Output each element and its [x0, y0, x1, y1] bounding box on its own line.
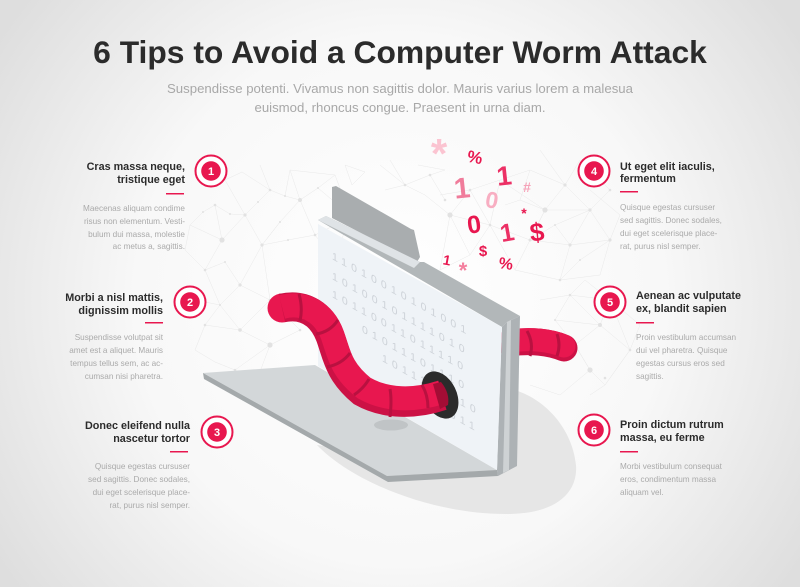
subtitle: [167, 81, 634, 115]
tip 1 heading: Cras massa neque,: [87, 161, 185, 173]
binary code: [332, 251, 480, 436]
tip 3 body: rat, purus nisl semper.: [109, 501, 190, 510]
tip 4 rule: [620, 191, 638, 192]
tip 4 badge: [578, 156, 610, 186]
tip 2 body: cumsan nisi pharetra.: [85, 372, 163, 381]
subtitle: Suspendisse potenti. Vivamus non sagittis dolor. Mauris varius lorem a malesua: [167, 81, 634, 96]
laptop base: [203, 365, 497, 476]
tip 1 badge: [196, 156, 226, 186]
screen top edge: [318, 216, 520, 327]
tip 6 badge: [578, 414, 610, 446]
tip 1 body: Maecenas aliquam condime: [83, 204, 185, 213]
floating symbols: 0: [483, 186, 501, 214]
tip 3 rule: [170, 451, 188, 452]
tip 6 body: eros, condimentum massa: [620, 475, 716, 484]
floating symbols: *: [431, 130, 448, 177]
binary code: 11010010101001: [332, 251, 470, 339]
laptop shadow: [317, 389, 576, 514]
tip 1 body: [83, 204, 185, 251]
tip 1 badge: 1: [208, 166, 214, 178]
floating symbols: 1: [442, 251, 452, 269]
tip 5 body: [636, 333, 737, 381]
floating symbols: $: [528, 216, 546, 248]
tip 6 heading: [620, 419, 724, 444]
tip 4 heading: fermentum: [620, 173, 676, 185]
tip 1 body: bulum dui massa, molestie: [88, 230, 185, 239]
floating symbols: 1: [498, 218, 517, 248]
tip 1: [83, 156, 226, 251]
tip 2 body: amet est a aliquet. Mauris: [69, 346, 163, 355]
tip 6 rule: [620, 451, 638, 452]
tip 2 heading: dignissim mollis: [78, 305, 163, 317]
tip 3 badge: [202, 416, 232, 448]
binary code: 101011: [420, 392, 479, 436]
tip 3 body: sed sagittis. Donec sodales,: [88, 475, 190, 484]
floating symbols: 1: [452, 172, 472, 206]
laptop illustration: [203, 186, 520, 482]
tip 6 heading: Proin dictum rutrum: [620, 419, 724, 431]
tip 2 rule: [145, 322, 163, 324]
tip 5 body: Proin vestibulum accumsan: [636, 333, 737, 342]
tip 4 heading: Ut eget elit iaculis,: [620, 161, 715, 173]
floating symbols: %: [498, 255, 514, 274]
floating symbols: %: [466, 147, 484, 168]
binary code: 01011101110: [362, 324, 468, 394]
tip 1 body: ac metus a, sagittis.: [113, 242, 185, 251]
tip 5: [594, 286, 741, 381]
tip 1 heading: tristique eget: [117, 174, 185, 186]
tip 2 heading: [65, 292, 163, 317]
binary code: 1011101010: [382, 353, 480, 419]
floating symbols: 0: [465, 210, 483, 240]
network world map pattern: [185, 150, 640, 395]
tip 3 heading: nascetur tortor: [113, 433, 191, 445]
title: 6 Tips to Avoid a Computer Worm Attack: [93, 34, 707, 70]
binary code: 10110011011110: [332, 289, 467, 375]
file tab: [332, 186, 420, 262]
tip 3 heading: Donec eleifend nulla: [85, 420, 191, 432]
tip 3 body: dui eget scelerisque place-: [93, 488, 190, 497]
trackpad: [374, 420, 408, 430]
tip 4 body: rat, purus nisl semper.: [620, 242, 701, 251]
tip 6 body: [620, 462, 723, 497]
tip 2 body: [69, 333, 164, 381]
tip 2 body: tempus tellus sem, ac ac-: [70, 359, 163, 368]
floating symbols: *: [459, 258, 468, 283]
tip 4: [578, 156, 722, 251]
floating symbols: [431, 130, 546, 283]
screen side: [497, 316, 520, 476]
subtitle: euismod, rhoncus congue. Praesent in urna diam.: [254, 100, 546, 115]
tip 3 heading: [85, 420, 191, 445]
tip 4 body: dui eget scelerisque place-: [620, 229, 718, 238]
tip 3 body: Quisque egestas cursuser: [95, 462, 190, 471]
tip 5 body: dui vel pharetra. Quisque: [636, 346, 728, 355]
tip 6 badge: 6: [591, 425, 597, 437]
binary code: 10100101111010: [332, 271, 469, 358]
hole in screen: [414, 365, 466, 425]
tip 5 rule: [636, 322, 654, 324]
tip 4 body: Quisque egestas cursuser: [620, 203, 715, 212]
floating symbols: $: [479, 243, 488, 260]
worm front section: [268, 294, 448, 417]
tip 4 badge: 4: [591, 166, 598, 178]
tip 4 body: sed sagittis. Donec sodales,: [620, 216, 722, 225]
tip 1 body: risus non elementum. Vesti-: [84, 217, 185, 226]
tip 2 body: Suspendisse volutpat sit: [75, 333, 164, 342]
floating symbols: 1: [495, 160, 513, 192]
tip 1 heading: [87, 161, 185, 186]
worm back section: [510, 331, 564, 356]
tip 2: [65, 286, 206, 381]
tip 4 heading: [620, 161, 715, 185]
base front edge: [203, 373, 498, 482]
tip 3 badge: 3: [214, 427, 220, 439]
tip 5 badge: 5: [607, 297, 613, 309]
worm mouth end: [433, 382, 448, 409]
screen face: [318, 224, 502, 470]
tip 5 body: egestas cursus eros sed: [636, 359, 725, 368]
tip 3: [85, 416, 232, 510]
tip 5 heading: ex, blandit sapien: [636, 303, 727, 315]
tip 3 body: [88, 462, 190, 510]
tip 2 badge: [174, 286, 206, 318]
tip 6: [578, 414, 724, 497]
screen top edge light part: [318, 216, 420, 268]
tip 5 badge: [594, 286, 626, 318]
tip 6 body: aliquam vel.: [620, 488, 664, 497]
tip 5 heading: [636, 290, 741, 315]
tip 5 heading: Aenean ac vulputate: [636, 290, 741, 302]
tip 2 badge: 2: [187, 297, 193, 309]
tip 1 rule: [166, 193, 184, 194]
floating symbols: *: [521, 205, 527, 221]
tip 6 body: Morbi vestibulum consequat: [620, 462, 723, 471]
tip 5 body: sagittis.: [636, 372, 664, 381]
floating symbols: #: [523, 179, 531, 195]
tip 2 heading: Morbi a nisl mattis,: [65, 292, 163, 304]
tip 4 body: [620, 203, 722, 251]
tip 6 heading: massa, eu ferme: [620, 432, 705, 444]
